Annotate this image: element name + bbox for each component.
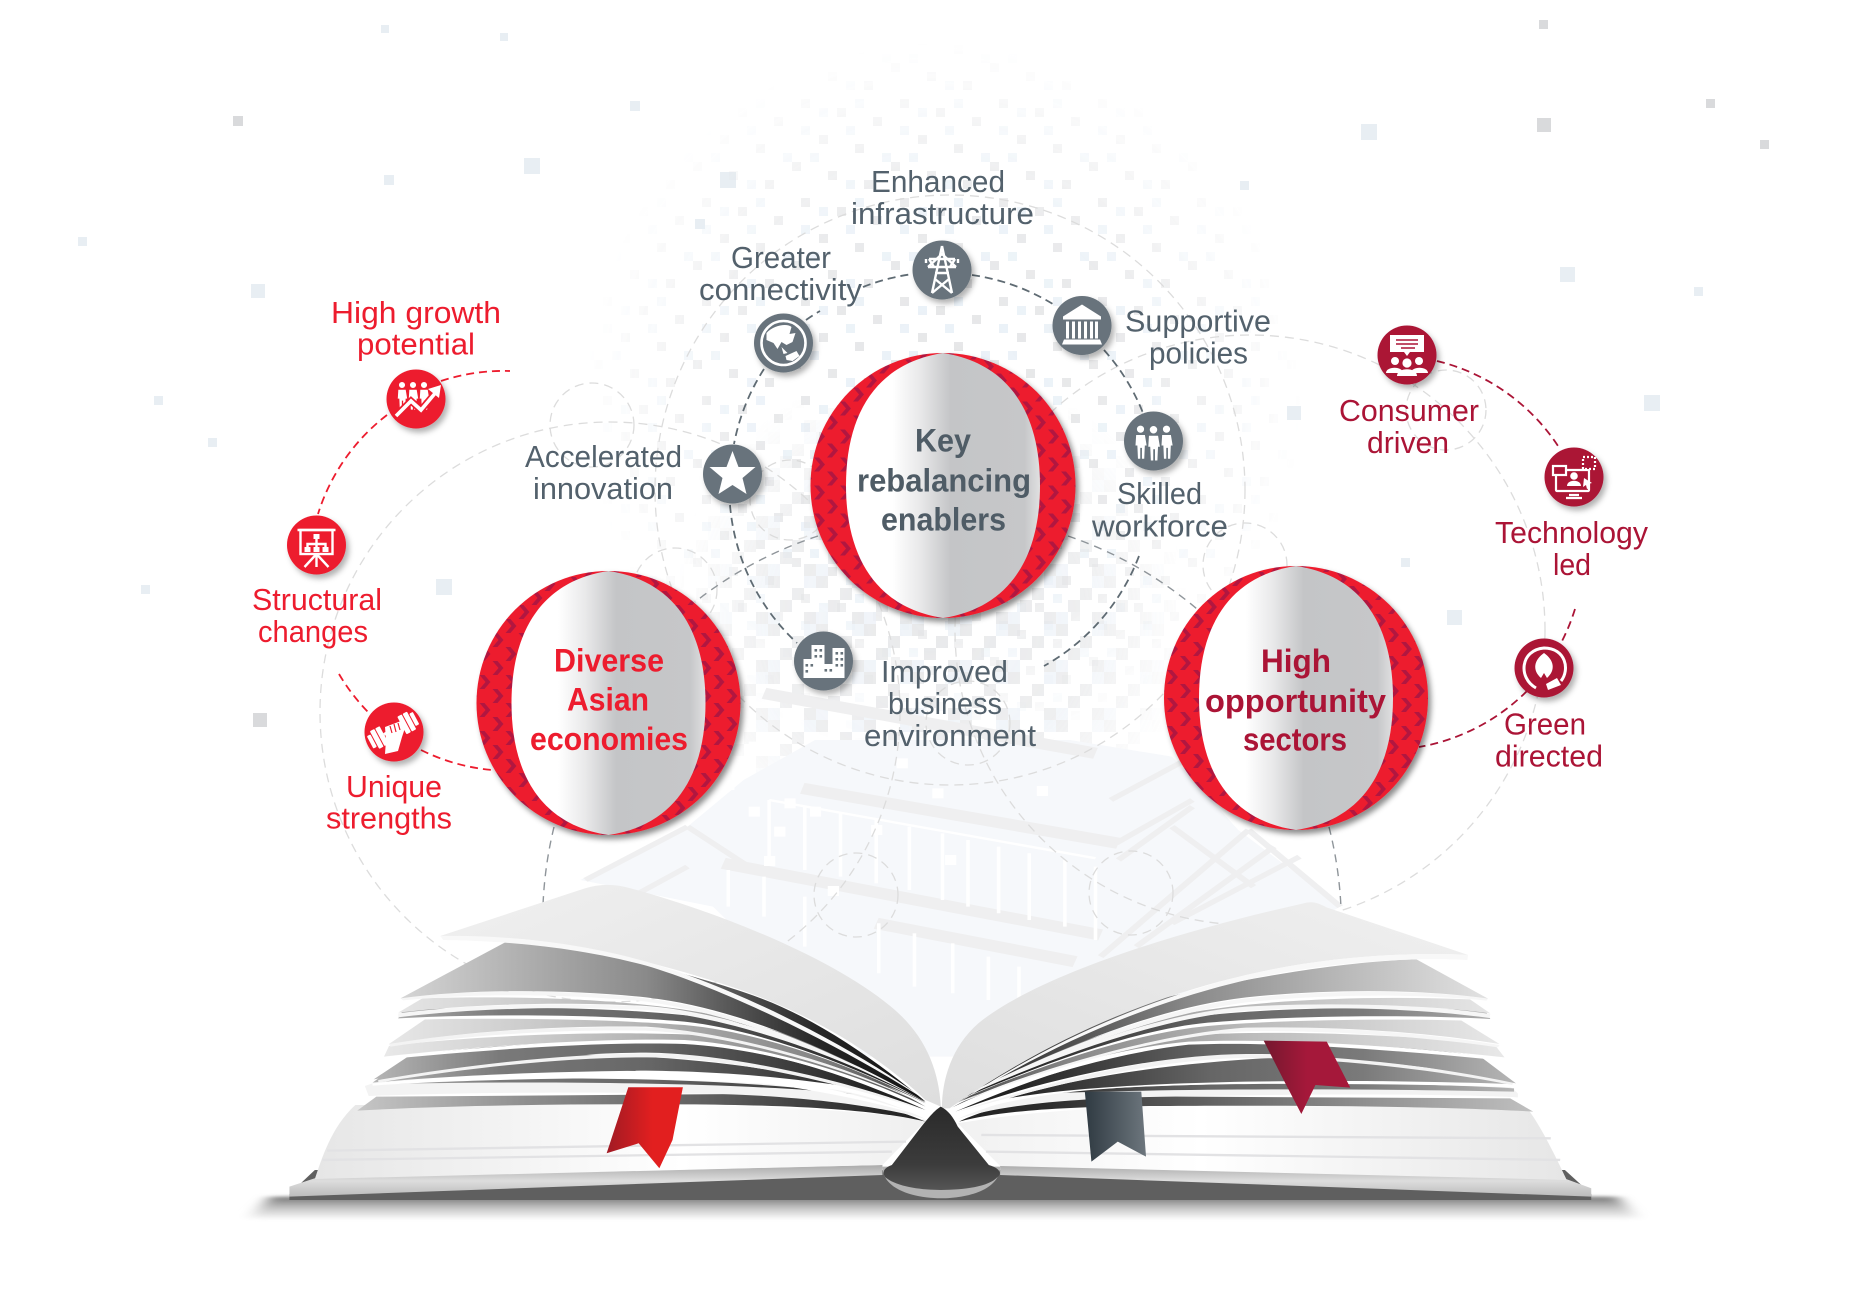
label: Accelerated innovation	[525, 439, 682, 506]
label: Unique strengths	[326, 769, 452, 835]
sphere title: Diverse	[554, 642, 664, 678]
icon: structural changes presentation	[287, 516, 346, 574]
sphere title: High	[1261, 643, 1331, 679]
label: Enhanced infrastructure	[851, 164, 1034, 231]
icon: green directed leaf plug	[1514, 638, 1574, 698]
icon: high growth potential	[386, 370, 446, 428]
label: Skilled workforce: Skilled	[1117, 476, 1202, 511]
scattered background squares	[78, 20, 1769, 727]
label: Structural changes	[252, 582, 382, 649]
label: Accelerated innovation: Accelerated	[525, 439, 682, 474]
label: Technology led: Technology	[1495, 515, 1648, 550]
icon: consumer driven audience	[1378, 326, 1436, 384]
faint dashed orbit circles	[320, 195, 1545, 1002]
label: Greater connectivity	[699, 240, 862, 307]
icon: greater connectivity globe	[754, 314, 813, 372]
sphere title: opportunity	[1205, 683, 1386, 719]
bookmark: crimson	[1264, 1041, 1350, 1114]
sphere title: enablers	[881, 502, 1006, 538]
faint building photograph	[580, 693, 1340, 1057]
crimson dashed ring: opportunity sectors	[1419, 361, 1575, 747]
label: Improved business environment	[864, 654, 1036, 753]
label: Improved business environment: business	[888, 686, 1002, 721]
label: Consumer driven: Consumer	[1339, 393, 1479, 428]
label: Enhanced infrastructure: Enhanced	[871, 164, 1005, 199]
red dashed ring: Asian economies	[318, 371, 510, 770]
icon: supportive policies bank	[1052, 296, 1112, 355]
label: Improved business environment: Improved	[881, 654, 1008, 689]
label: Greater connectivity: Greater	[731, 240, 831, 275]
label: Skilled workforce: workforce	[1091, 508, 1228, 543]
label: Green directed	[1495, 706, 1603, 773]
icon: skilled workforce people	[1124, 412, 1183, 470]
label: Unique strengths: Unique	[346, 769, 442, 804]
icon: technology led monitor	[1544, 448, 1604, 506]
label: High growth potential: High growth	[331, 295, 501, 330]
label: Greater connectivity: connectivity	[699, 272, 862, 307]
pixel dissolve background	[657, 108, 1237, 756]
book ground shadow	[247, 1197, 1640, 1220]
label: Skilled workforce	[1091, 476, 1228, 543]
label: Technology led: led	[1553, 547, 1591, 582]
sphere title: rebalancing	[857, 462, 1031, 498]
sphere title: Key	[915, 422, 971, 458]
label: Supportive policies	[1125, 303, 1271, 370]
book cover and page block	[289, 1105, 1591, 1200]
icon: enhanced infrastructure pylon	[912, 240, 972, 300]
left page stack	[357, 885, 941, 1122]
label: Improved business environment: environment	[864, 718, 1036, 753]
icon: improved business environment buildings	[794, 632, 853, 690]
dashed ring of key enablers	[730, 274, 1143, 666]
right page stack	[942, 902, 1533, 1122]
sphere title	[857, 422, 1031, 538]
connector arcs between spheres	[543, 536, 1341, 908]
label: High growth potential: potential	[357, 326, 475, 361]
sphere: Diverse Asian economies	[476, 571, 740, 835]
icon: unique strengths dumbbell	[364, 702, 424, 762]
label: Accelerated innovation: innovation	[533, 471, 673, 506]
sphere title	[1205, 643, 1386, 758]
label: Enhanced infrastructure: infrastructure	[851, 196, 1034, 231]
label: Consumer driven	[1339, 393, 1479, 460]
label: Consumer driven: driven	[1367, 425, 1449, 460]
book spine	[882, 1107, 1000, 1198]
label: High growth potential	[331, 295, 501, 361]
sphere: High opportunity sectors	[1164, 566, 1428, 830]
icon: accelerated innovation star	[703, 444, 762, 504]
label: Supportive policies: Supportive	[1125, 303, 1271, 338]
label: Technology led	[1495, 515, 1648, 582]
label: Supportive policies: policies	[1149, 335, 1248, 370]
bookmark: grey	[1085, 1092, 1146, 1162]
label: Green directed: Green	[1504, 706, 1586, 741]
label: Green directed: directed	[1495, 738, 1603, 773]
sphere title: economies	[530, 721, 688, 757]
label: Structural changes: changes	[258, 614, 368, 649]
label: Unique strengths: strengths	[326, 800, 452, 835]
open book	[247, 885, 1640, 1220]
sphere title	[530, 642, 688, 757]
label: Structural changes: Structural	[252, 582, 382, 617]
sphere title: Asian	[567, 682, 649, 718]
sphere title: sectors	[1243, 722, 1347, 758]
sphere: Key rebalancing enablers	[810, 353, 1076, 618]
bookmark: red	[607, 1087, 683, 1168]
